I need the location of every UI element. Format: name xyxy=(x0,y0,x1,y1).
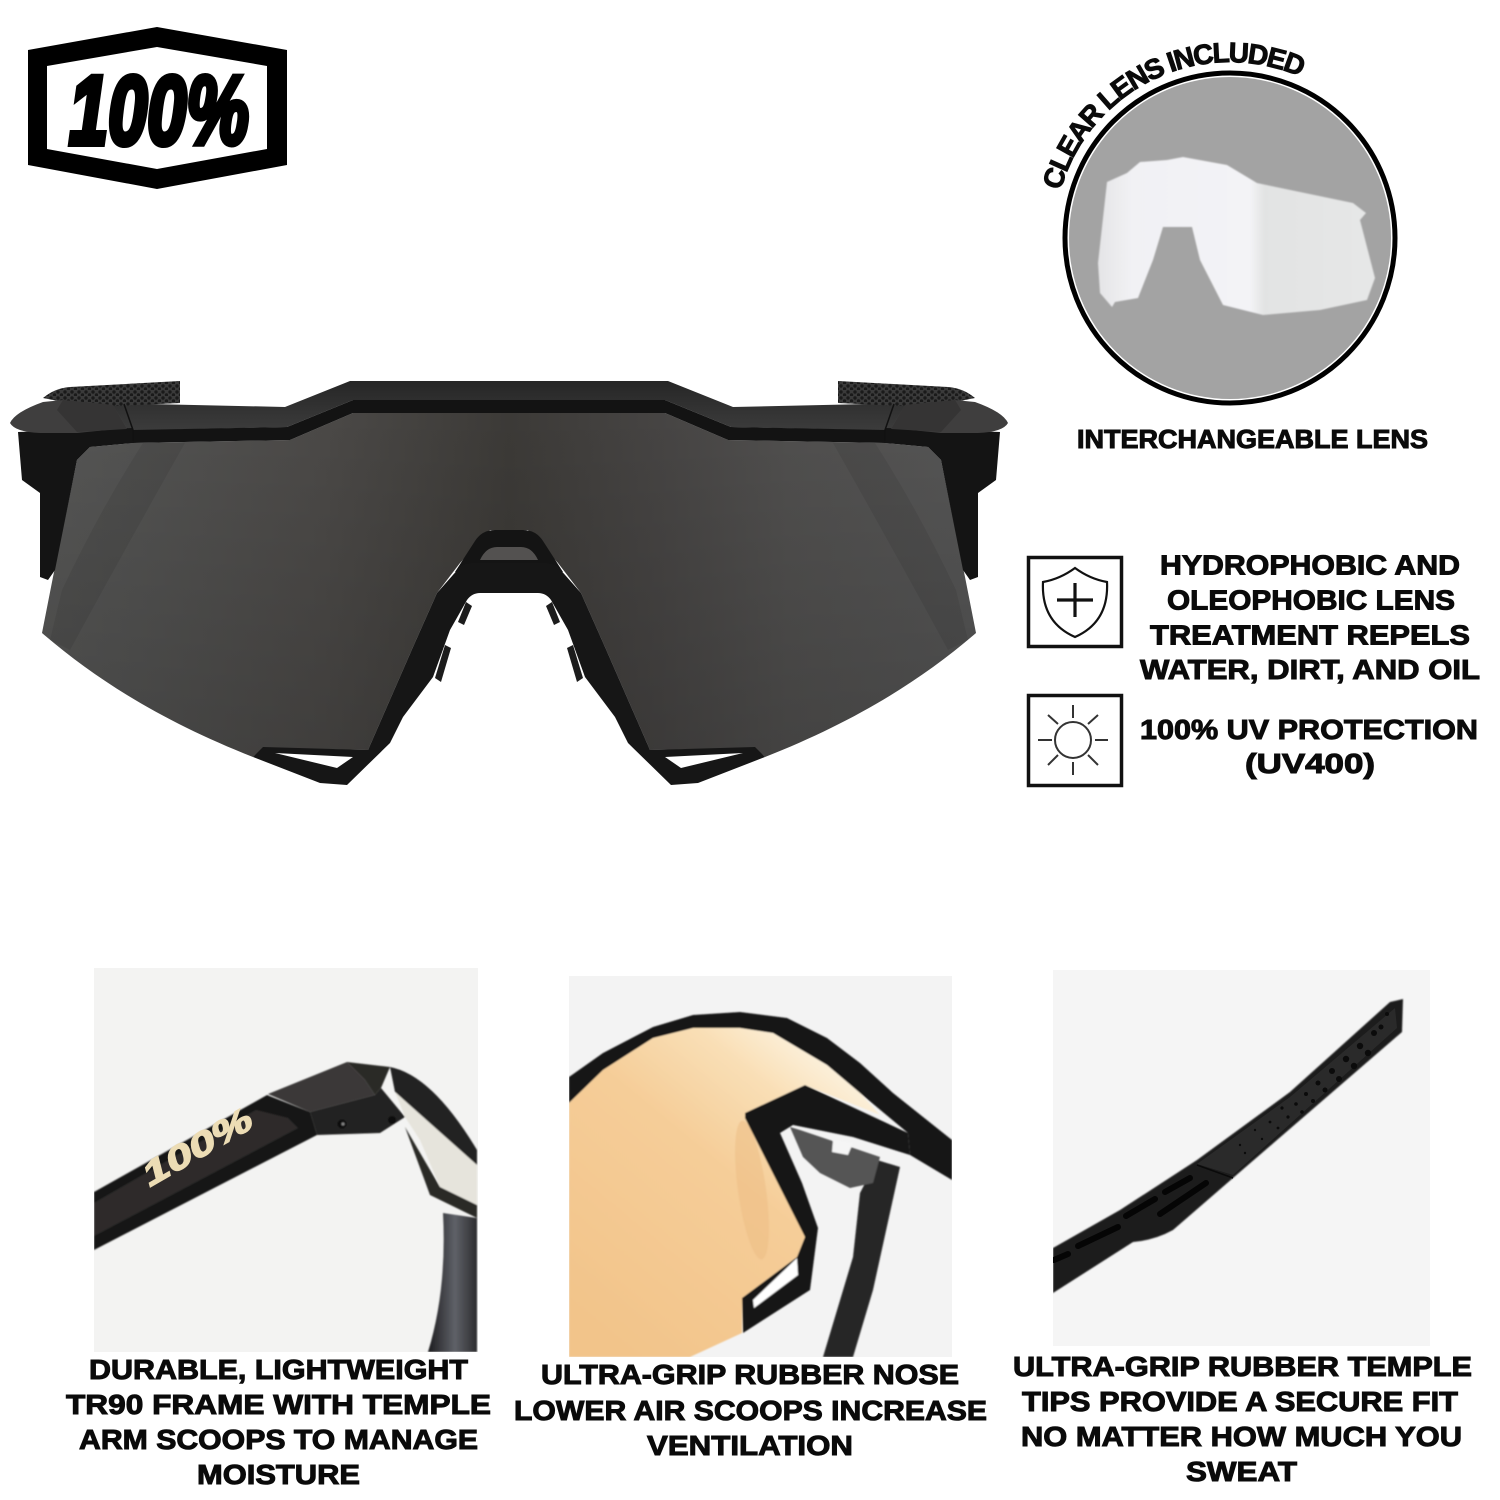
logo: 100% badge: 100% xyxy=(69,56,249,165)
panel: temple tip photo xyxy=(1053,970,1430,1346)
right temple hinge xyxy=(838,381,1008,580)
temple arm xyxy=(1053,999,1403,1293)
caption: temple tips: ULTRA-GRIP RUBBER TEMPLE xyxy=(1013,1351,1472,1382)
caption: frame: ARM SCOOPS TO MANAGE xyxy=(79,1424,478,1455)
treatment text: OLEOPHOBIC LENS xyxy=(1167,584,1455,616)
treatment text: TREATMENT REPELS xyxy=(1150,620,1470,650)
nose grip bumps xyxy=(435,602,583,682)
slots xyxy=(1054,1178,1206,1260)
air scoop vents xyxy=(275,753,743,768)
lens caption: INTERCHANGEABLE LENS xyxy=(1077,424,1428,454)
feature: UV protection xyxy=(1028,696,1478,786)
icon: sun xyxy=(1028,696,1122,786)
treatment text: HYDROPHOBIC AND xyxy=(1160,550,1460,580)
brand mark on temple arm: 100% xyxy=(135,1100,259,1193)
UV text xyxy=(1140,714,1478,779)
icon: shield xyxy=(1028,558,1122,646)
top frame xyxy=(569,1012,952,1180)
panel: nose and air scoop photo xyxy=(569,976,952,1357)
treatment text xyxy=(1140,550,1480,685)
panel: temple arm photo xyxy=(94,968,478,1352)
logo: 100% badge xyxy=(28,27,287,189)
caption: frame: MOISTURE xyxy=(197,1459,360,1490)
temple arm behind xyxy=(823,1160,900,1357)
black nose arm xyxy=(742,1085,910,1333)
circle outline xyxy=(1065,73,1395,403)
UV text: 100% UV PROTECTION xyxy=(1140,714,1478,745)
grip texture xyxy=(1239,1012,1389,1154)
caption: temple tips: NO MATTER HOW MUCH YOU xyxy=(1021,1421,1462,1452)
brow frame lower band xyxy=(80,400,938,446)
curved label: CLEAR LENS INCLUDED xyxy=(1044,42,1304,188)
lens circle badge xyxy=(1069,77,1391,399)
caption: nose: VENTILATION xyxy=(647,1430,853,1461)
panel: interchangeable clear lens xyxy=(1044,42,1428,454)
nose bridge arch xyxy=(455,530,563,572)
treatment text: WATER, DIRT, AND OIL xyxy=(1140,654,1480,685)
feature: lens treatment xyxy=(1028,550,1480,685)
caption: frame: DURABLE, LIGHTWEIGHT xyxy=(89,1354,468,1385)
caption: temple tips: SWEAT xyxy=(1186,1456,1297,1487)
clear lens shape xyxy=(1098,157,1375,315)
brow frame upper band xyxy=(105,381,913,431)
air scoop slot xyxy=(753,1258,798,1308)
caption: frame xyxy=(66,1354,491,1490)
gold lens xyxy=(569,1028,880,1357)
caption: temple tips xyxy=(1013,1351,1472,1487)
caption: nose xyxy=(514,1359,987,1461)
lens xyxy=(42,413,976,757)
nose pad xyxy=(790,1127,880,1188)
left temple hinge xyxy=(10,381,180,580)
UV text: (UV400) xyxy=(1245,748,1375,779)
main product: sunglasses xyxy=(10,381,1008,785)
caption: nose: ULTRA-GRIP RUBBER NOSE xyxy=(541,1359,959,1390)
caption: nose: LOWER AIR SCOOPS INCREASE xyxy=(514,1395,987,1426)
rubber tip panel xyxy=(1197,1008,1397,1175)
caption: frame: TR90 FRAME WITH TEMPLE xyxy=(66,1389,491,1420)
rubber nose piece and lower frame xyxy=(253,563,765,785)
caption: temple tips: TIPS PROVIDE A SECURE FIT xyxy=(1022,1386,1458,1417)
